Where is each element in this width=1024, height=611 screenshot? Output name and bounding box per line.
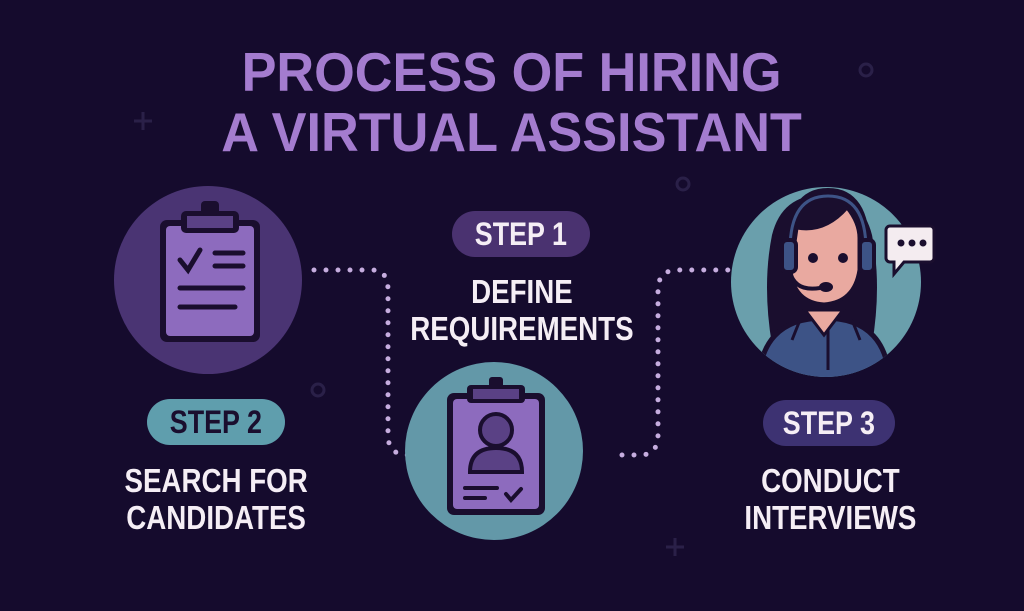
- step 1 label: DEFINE: [471, 273, 573, 310]
- step 2 pill: [147, 399, 285, 445]
- step 1 pill: STEP 1: [475, 216, 567, 252]
- title: PROCESS OF HIRING: [242, 41, 782, 103]
- step 2 label: [124, 462, 308, 536]
- step 3 pill: [763, 400, 895, 446]
- decorations: [134, 64, 872, 556]
- step 1 label: REQUIREMENTS: [410, 310, 634, 347]
- step 3 pill: STEP 3: [783, 405, 875, 441]
- step 2 pill: STEP 2: [170, 404, 262, 440]
- title: [222, 41, 802, 163]
- step 1 label: [410, 273, 634, 347]
- step 3 label: [744, 462, 916, 536]
- icon: checklist circle: [114, 186, 302, 374]
- icon: profile circle: [405, 362, 583, 540]
- step 3 label: INTERVIEWS: [744, 499, 916, 536]
- connector right: [622, 270, 728, 455]
- connector left: [314, 270, 418, 455]
- step 2 label: SEARCH FOR: [124, 462, 308, 499]
- title: A VIRTUAL ASSISTANT: [222, 101, 802, 163]
- step 1 pill: [452, 211, 590, 257]
- icon: support agent circle: [731, 187, 934, 390]
- step 3 label: CONDUCT: [761, 462, 899, 499]
- step 2 label: CANDIDATES: [126, 499, 306, 536]
